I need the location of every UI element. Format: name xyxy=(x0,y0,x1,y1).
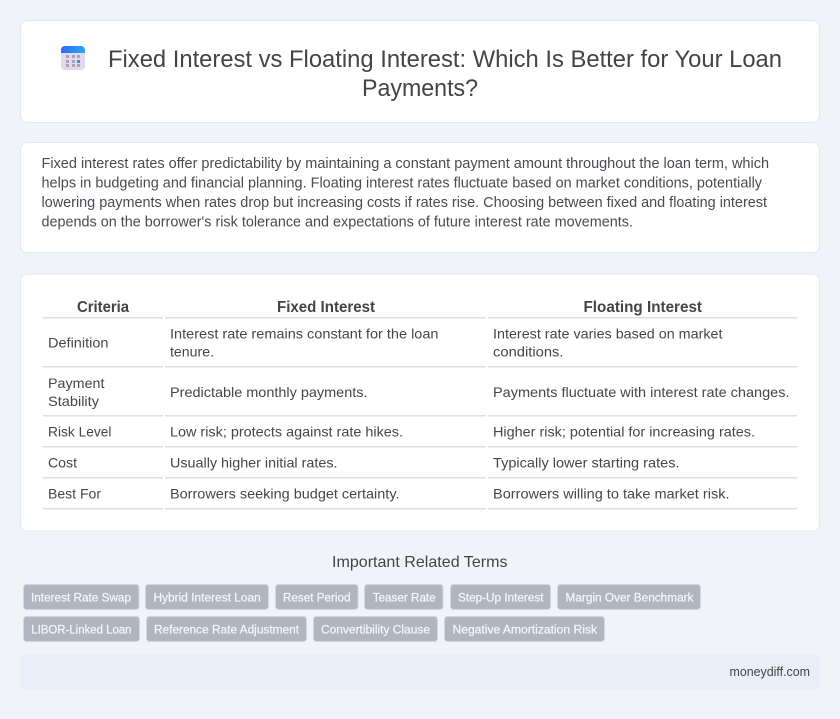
table header row xyxy=(43,299,797,318)
tag: Interest Rate Swap: Interest Rate Swap xyxy=(31,590,131,604)
table row: Definition: Interest rate varies based on market xyxy=(493,326,723,342)
tag: Convertibility Clause: Convertibility Clause xyxy=(321,622,430,636)
table row: Best For xyxy=(43,486,797,510)
tag: Step-Up Interest: Step-Up Interest xyxy=(458,590,544,604)
table header row: Floating Interest xyxy=(584,299,703,316)
tag: Negative Amortization Risk xyxy=(444,616,604,642)
footer xyxy=(20,655,820,689)
table row: Cost: Typically lower starting rates. xyxy=(493,454,680,470)
tag: Convertibility Clause xyxy=(314,616,438,642)
tag: Hybrid Interest Loan: Hybrid Interest Loan xyxy=(154,590,261,604)
text block: intro paragraph xyxy=(42,156,769,230)
table row: Definition: Interest rate remains constant for the loan xyxy=(170,326,438,342)
table row: Best For: Borrowers willing to take market risk. xyxy=(493,486,730,502)
tag: Reference Rate Adjustment xyxy=(146,616,306,642)
tag: Hybrid Interest Loan xyxy=(146,584,268,610)
table row: Risk Level: Risk Level xyxy=(48,424,112,440)
table header row: Fixed Interest xyxy=(277,299,376,316)
table row: Best For: Borrowers seeking budget certainty. xyxy=(170,486,400,502)
tag: Negative Amortization Risk: Negative Amortization Risk xyxy=(452,622,598,636)
table row: Payment Stability: Stability xyxy=(48,393,99,409)
table row: Payment Stability xyxy=(43,375,797,416)
tag: Teaser Rate: Teaser Rate xyxy=(373,590,436,604)
panel: comparison table xyxy=(20,274,820,531)
tag: Reference Rate Adjustment: Reference Rate Adjustment xyxy=(154,622,300,636)
panel: header xyxy=(20,20,820,122)
tag: Margin Over Benchmark xyxy=(558,584,700,610)
table header row: Criteria xyxy=(77,299,129,316)
table row: Payment Stability: Payments fluctuate with interest rate changes. xyxy=(493,384,790,400)
tag: Interest Rate Swap xyxy=(24,584,139,610)
tag: Margin Over Benchmark: Margin Over Benchmark xyxy=(566,590,694,604)
tag: LIBOR-Linked Loan: LIBOR-Linked Loan xyxy=(31,622,132,636)
table row: Risk Level: Higher risk; potential for increasing rates. xyxy=(493,424,755,440)
heading: related terms: Important Related Terms xyxy=(332,554,508,571)
table row: Best For: Best For xyxy=(48,486,101,502)
table row: Cost: Cost xyxy=(48,454,77,470)
table row: Cost xyxy=(43,454,797,478)
tag: LIBOR-Linked Loan xyxy=(24,616,140,642)
text block: intro paragraph: depends on the borrower's risk tolerance and expectations of future interest rate movements. xyxy=(42,214,633,230)
table row: Payment Stability: Predictable monthly payments. xyxy=(170,384,368,400)
title: Fixed Interest vs Floating Interest: Which Is Better for Your Loan xyxy=(108,46,782,73)
text block: intro paragraph: lowering payments when rates drop but increasing costs if rates rise. Choosing between fixed and floating interest xyxy=(42,195,767,211)
text block: intro paragraph: helps in budgeting and financial planning. Floating interest rates fluctuate based on market conditions, potentially xyxy=(42,176,763,192)
text block: intro paragraph: Fixed interest rates offer predictability by maintaining a constant payment amount throughout the loan term, which xyxy=(42,156,769,172)
table row: Definition: Definition xyxy=(48,334,108,350)
title xyxy=(108,46,782,102)
tag: Reset Period xyxy=(276,584,358,610)
table row: Risk Level: Low risk; protects against rate hikes. xyxy=(170,424,403,440)
tag: Reset Period: Reset Period xyxy=(283,590,351,604)
related term tags xyxy=(24,584,700,642)
footer: moneydiff.com xyxy=(730,665,810,679)
table row: Definition: conditions. xyxy=(493,344,564,360)
table row: Risk Level xyxy=(43,424,797,448)
table row: Cost: Usually higher initial rates. xyxy=(170,454,338,470)
tag: Step-Up Interest xyxy=(450,584,550,610)
table row: Payment Stability: Payment xyxy=(48,375,105,391)
panel: introduction xyxy=(20,142,820,252)
tag: Teaser Rate xyxy=(364,584,443,610)
table row: Definition: tenure. xyxy=(170,344,214,360)
icon: calendar xyxy=(61,46,85,70)
table row: Definition xyxy=(43,326,797,368)
title: Payments? xyxy=(362,75,478,102)
